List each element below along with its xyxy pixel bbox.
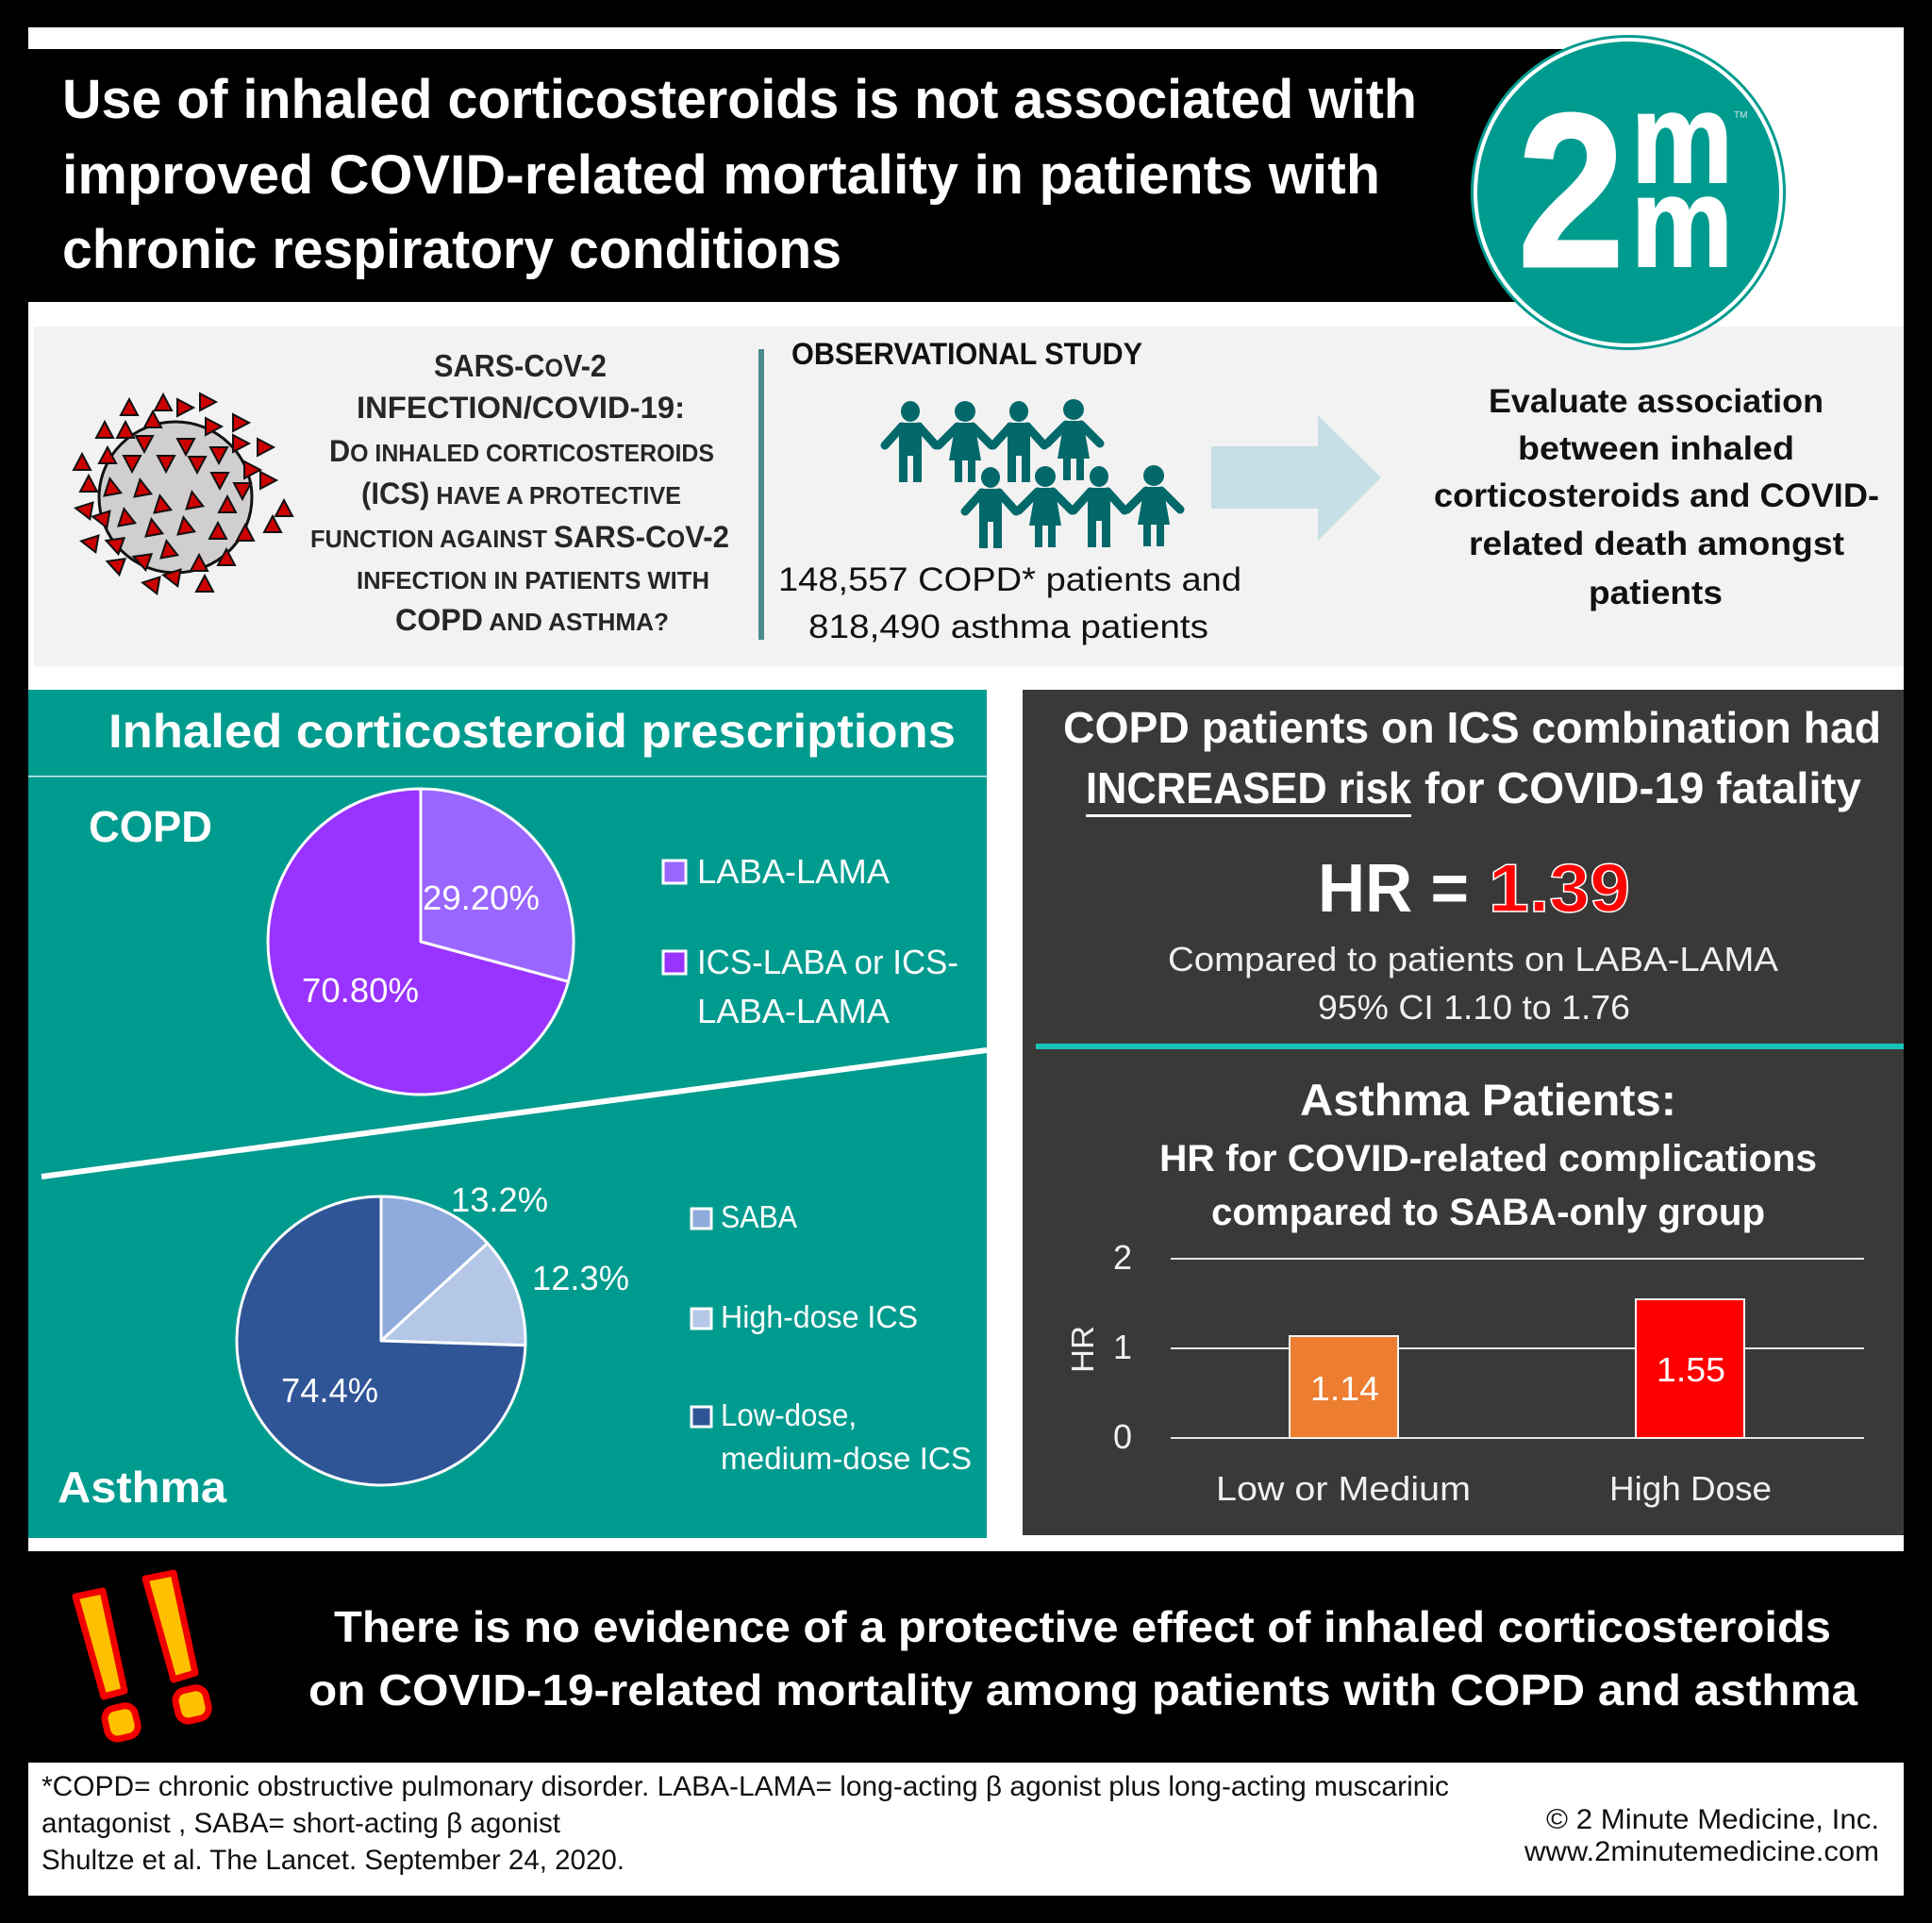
text block: study aim: patients	[1589, 575, 1723, 611]
title banner: chronic respiratory conditions	[62, 219, 841, 280]
text block: comparison: 95% CI 1.10 to 1.76	[1318, 988, 1630, 1027]
legend: asthma	[691, 1199, 972, 1476]
text block: study aim: corticosteroids and COVID-	[1434, 477, 1879, 514]
label: asthma: Asthma	[58, 1463, 226, 1512]
text block: patient counts: 818,490 asthma patients	[808, 609, 1208, 645]
text block: research question: SARS-COV-2	[434, 348, 607, 383]
legend: COPD: ICS-LABA or ICS-	[697, 943, 958, 981]
panel: results	[1023, 690, 1904, 1535]
text block: research question: FUNCTION AGAINST SARS-COV-2	[310, 520, 729, 554]
title banner	[28, 49, 1575, 302]
pie chart: COPD	[268, 789, 574, 1095]
icon: exclamation marks	[75, 1573, 210, 1741]
panel: inhaled corticosteroid prescriptions	[28, 690, 987, 1538]
heading: COPD result: COPD patients on ICS combination had	[1063, 703, 1881, 752]
bar chart: asthma hazard ratios: 0	[1113, 1417, 1132, 1456]
heading: asthma patients: compared to SABA-only group	[1211, 1192, 1765, 1233]
text block: research question: INFECTION/COVID-19:	[357, 391, 685, 425]
heading: COPD result: INCREASED risk	[1086, 763, 1411, 812]
legend: asthma: High-dose ICS	[721, 1299, 918, 1334]
text block: comparison: Compared to patients on LABA-LAMA	[1168, 940, 1778, 978]
heading: COPD result: for COVID-19 fatality	[1424, 763, 1861, 812]
panel: conclusion	[28, 1551, 1904, 1763]
bar chart: asthma hazard ratios: 1.14	[1310, 1369, 1379, 1408]
logo: 2 Minute Medicine: m	[1631, 67, 1733, 209]
text block: conclusion: on COVID-19-related mortality among patients with COPD and asthma	[308, 1665, 1857, 1714]
bar chart: asthma hazard ratios: High Dose	[1609, 1469, 1772, 1508]
bar chart: asthma hazard ratios: Low or Medium	[1216, 1469, 1471, 1508]
bar chart: asthma hazard ratios: 1.55	[1657, 1350, 1725, 1389]
text block: conclusion	[308, 1602, 1857, 1714]
pie chart: asthma: 74.4%	[281, 1371, 378, 1410]
icon: virus	[74, 393, 292, 594]
copyright: www.2minutemedicine.com	[1524, 1836, 1879, 1867]
text block: patient counts	[778, 561, 1241, 645]
arrow	[1211, 415, 1381, 541]
text block: research question: COPD AND ASTHMA?	[395, 603, 669, 637]
legend: asthma: Low-dose,	[721, 1397, 857, 1432]
bar chart: asthma hazard ratios: 2	[1113, 1238, 1132, 1277]
stat: hazard ratio 1.39: 1.39	[1489, 851, 1630, 927]
text block: study aim: between inhaled	[1518, 430, 1794, 467]
heading: COPD result	[1063, 703, 1881, 817]
logo: 2 Minute Medicine: 2	[1518, 69, 1624, 313]
text block: study aim	[1434, 383, 1879, 611]
logo: 2 Minute Medicine: m	[1631, 151, 1733, 293]
text block: research question: INFECTION IN PATIENTS WITH	[357, 566, 709, 594]
text block: comparison	[1168, 940, 1778, 1027]
text block: study aim: related death amongst	[1469, 526, 1844, 562]
footnote: *COPD= chronic obstructive pulmonary disorder. LABA-LAMA= long-acting β agonist plus long-acting muscarinic	[42, 1771, 1449, 1802]
icon: patient group	[885, 399, 1180, 548]
label: COPD: COPD	[89, 802, 212, 851]
footnote: antagonist , SABA= short-acting β agonist	[42, 1808, 561, 1839]
bar chart: asthma hazard ratios: 1	[1113, 1328, 1132, 1366]
legend: COPD: LABA-LAMA	[697, 992, 890, 1030]
bar chart: asthma hazard ratios	[1065, 1238, 1864, 1508]
text block: research question	[310, 348, 729, 637]
pie chart: asthma	[237, 1180, 629, 1485]
copyright	[1524, 1804, 1879, 1867]
legend: asthma: medium-dose ICS	[721, 1441, 972, 1476]
pie chart: COPD: 70.80%	[302, 971, 419, 1010]
heading: asthma patients	[1159, 1075, 1817, 1233]
text block: patient counts: 148,557 COPD* patients and	[778, 561, 1241, 598]
logo: 2 Minute Medicine	[1471, 35, 1786, 350]
footnote: Shultze et al. The Lancet. September 24, 2020.	[42, 1845, 625, 1876]
heading: asthma patients: Asthma Patients:	[1300, 1075, 1676, 1125]
stat: hazard ratio 1.39	[1318, 851, 1630, 927]
footnote	[42, 1771, 1449, 1876]
heading: prescriptions: Inhaled corticosteroid prescriptions	[108, 705, 956, 758]
title banner: improved COVID-related mortality in patients with	[62, 144, 1380, 206]
text block: study aim: Evaluate association	[1489, 383, 1824, 420]
stat: hazard ratio 1.39: HR =	[1318, 851, 1469, 927]
copyright: © 2 Minute Medicine, Inc.	[1546, 1804, 1879, 1835]
logo: 2 Minute Medicine: TM	[1734, 110, 1747, 121]
heading: asthma patients: HR for COVID-related complications	[1159, 1138, 1817, 1179]
pie chart: asthma: 13.2%	[451, 1180, 548, 1219]
text block: conclusion: There is no evidence of a protective effect of inhaled corticosteroids	[334, 1602, 1831, 1651]
legend: asthma: SABA	[721, 1199, 797, 1234]
bar chart: asthma hazard ratios: HR	[1065, 1326, 1100, 1373]
legend: COPD: LABA-LAMA	[697, 852, 890, 891]
text block: research question: (ICS) HAVE A PROTECTIVE	[361, 477, 681, 510]
pie chart: COPD: 29.20%	[423, 878, 540, 917]
legend: COPD	[663, 852, 958, 1030]
pie chart: asthma: 12.3%	[532, 1259, 629, 1297]
heading: observational study: OBSERVATIONAL STUDY	[791, 337, 1142, 371]
title banner: Use of inhaled corticosteroids is not associated with	[62, 69, 1417, 130]
text block: research question: DO INHALED CORTICOSTEROIDS	[329, 434, 714, 468]
panel: study overview	[34, 326, 1904, 666]
